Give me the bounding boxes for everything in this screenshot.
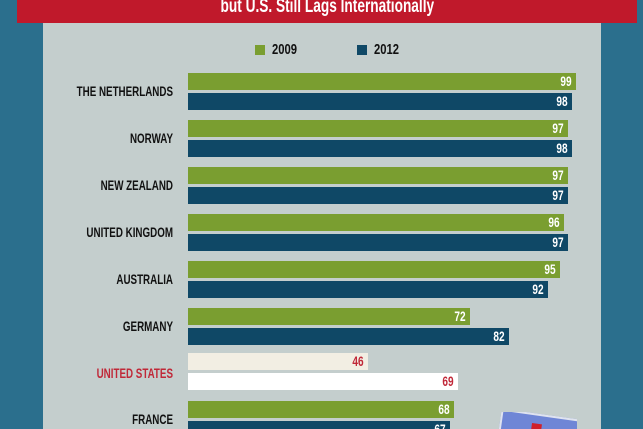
row: Australia: 95 [545,261,556,277]
row: United States: 69 [443,373,454,389]
row: Norway: 97 [553,120,564,136]
legend [255,41,399,58]
row: Germany: 72 [455,308,466,324]
row: New Zealand [101,167,568,204]
row: New Zealand: 97 [553,167,564,183]
row: New Zealand: NEW ZEALAND [101,177,173,193]
row: France: FRANCE [132,411,173,427]
row: United States: UNITED STATES [97,365,173,381]
row: Australia: 92 [533,281,544,297]
bar chart [76,73,576,429]
row: UK: 97 [553,234,564,250]
row: Germany [123,308,509,345]
row: Netherlands [76,73,576,110]
row: Netherlands: THE NETHERLANDS [77,83,173,99]
row: Netherlands: 99 [561,73,572,89]
row: United States: 46 [353,353,364,369]
row: Australia: AUSTRALIA [116,271,173,287]
row: Germany: 82 [494,328,505,344]
row: UK [86,214,568,251]
row: UK: 96 [549,214,560,230]
legend: 2009 [272,41,297,58]
icon: decorative picture [499,412,577,429]
legend: 2012 [374,41,399,58]
row: New Zealand: 97 [553,187,564,203]
row: Norway: NORWAY [130,130,173,146]
row: UK: UNITED KINGDOM [86,224,173,240]
row: Norway [130,120,572,157]
row: France: 68 [439,401,450,417]
row: Australia [116,261,560,298]
row: Germany: GERMANY [123,318,173,334]
row: Netherlands: 98 [557,93,568,109]
title banner [17,0,637,23]
row: Norway: 98 [557,140,568,156]
